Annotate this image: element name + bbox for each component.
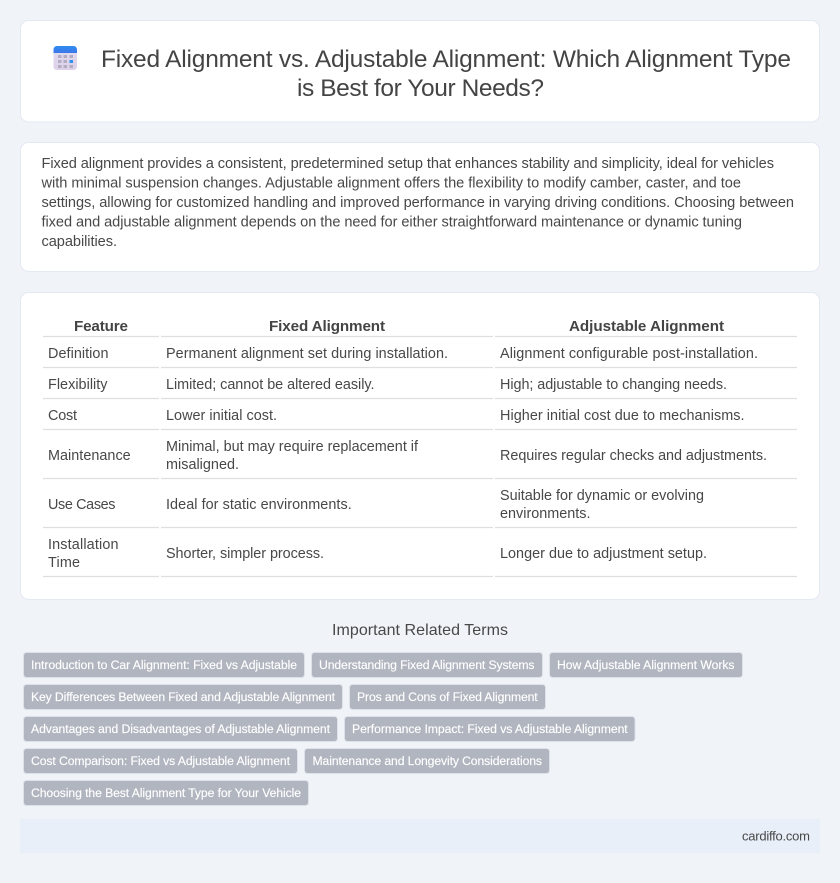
- tag: [350, 684, 546, 710]
- text block: description: fixed and adjustable alignment depends on the need for either straightforward maintenance or dynamic tuning: [42, 214, 742, 230]
- tags: related terms: [24, 652, 742, 806]
- footer: [20, 819, 820, 853]
- row: maintenance: Minimal, but may require replacement if: [166, 439, 419, 455]
- tag: [312, 652, 542, 678]
- tag: Maintenance and Longevity Considerations: [312, 754, 542, 768]
- tag: Pros and Cons of Fixed Alignment: [357, 690, 538, 704]
- table header row: Fixed Alignment: [269, 318, 385, 335]
- row: maintenance: Requires regular checks and adjustments.: [500, 448, 767, 464]
- row: use cases: Ideal for static environments.: [166, 497, 352, 513]
- row: definition: [48, 346, 758, 362]
- tag: [24, 716, 338, 742]
- row: use cases: [48, 488, 704, 522]
- tag: Choosing the Best Alignment Type for Your Vehicle: [31, 786, 301, 800]
- table header row: Feature: [74, 318, 128, 335]
- tag: [344, 716, 635, 742]
- heading: important related terms: Important Related Terms: [332, 622, 508, 639]
- row: use cases: Use Cases: [48, 497, 116, 513]
- tag: Introduction to Car Alignment: Fixed vs Adjustable: [31, 658, 297, 672]
- tag: [24, 748, 298, 774]
- tag: Advantages and Disadvantages of Adjustable Alignment: [31, 722, 331, 736]
- panel: title header: [20, 20, 820, 122]
- title: Fixed Alignment vs. Adjustable Alignment: Which Alignment Type: [101, 46, 791, 73]
- panel: description: [20, 142, 820, 272]
- text block: description: with minimal suspension changes. Adjustable alignment offers the flexibility to modify camber, caster, and toe: [40, 176, 741, 192]
- row: maintenance: [48, 439, 767, 473]
- row: installation time: Longer due to adjustment setup.: [500, 546, 707, 562]
- row: use cases: Suitable for dynamic or evolving: [500, 488, 704, 504]
- text block: description: capabilities.: [42, 234, 117, 250]
- row: installation time: [48, 537, 707, 571]
- row: flexibility: [48, 377, 727, 393]
- text block: description: settings, allowing for customized handling and improved performance in varying driving conditions. Choosing between: [42, 195, 794, 211]
- table header row: [74, 318, 724, 335]
- row: cost: Cost: [48, 408, 77, 424]
- icon: calendar: [54, 46, 77, 70]
- row: cost: Lower initial cost.: [166, 408, 277, 424]
- title: [101, 46, 791, 102]
- row: installation time: Installation: [48, 537, 118, 553]
- tag: Performance Impact: Fixed vs Adjustable Alignment: [352, 722, 628, 736]
- tag: [24, 780, 308, 806]
- tag: Understanding Fixed Alignment Systems: [319, 658, 534, 672]
- tag: [24, 652, 304, 678]
- row: maintenance: misaligned.: [166, 457, 239, 473]
- text block: description: Fixed alignment provides a consistent, predetermined setup that enhances stability and simplicity, ideal for vehicles: [42, 156, 774, 172]
- table header row: Adjustable Alignment: [569, 318, 724, 335]
- text block: description: [40, 156, 794, 250]
- tag: [304, 748, 550, 774]
- title: is Best for Your Needs?: [297, 75, 544, 102]
- tag: Key Differences Between Fixed and Adjustable Alignment: [31, 690, 336, 704]
- row: flexibility: High; adjustable to changing needs.: [500, 377, 727, 393]
- tag: [550, 652, 742, 678]
- tag: How Adjustable Alignment Works: [557, 658, 734, 672]
- footer text: cardiffo.com: cardiffo.com: [742, 828, 810, 844]
- tag: [24, 684, 342, 710]
- row: flexibility: Limited; cannot be altered easily.: [166, 377, 374, 393]
- panel: comparison table: [20, 292, 820, 600]
- row: installation time: Time: [48, 555, 80, 571]
- row: definition: Permanent alignment set during installation.: [166, 346, 448, 362]
- row: cost: Higher initial cost due to mechanisms.: [500, 408, 744, 424]
- row: definition: Alignment configurable post-installation.: [500, 346, 758, 362]
- row: definition: Definition: [48, 346, 108, 362]
- row: flexibility: Flexibility: [48, 377, 108, 393]
- row: installation time: Shorter, simpler process.: [166, 546, 324, 562]
- row: maintenance: Maintenance: [48, 448, 131, 464]
- row: cost: [48, 408, 744, 424]
- row: use cases: environments.: [500, 506, 590, 522]
- tag: Cost Comparison: Fixed vs Adjustable Alignment: [31, 754, 291, 768]
